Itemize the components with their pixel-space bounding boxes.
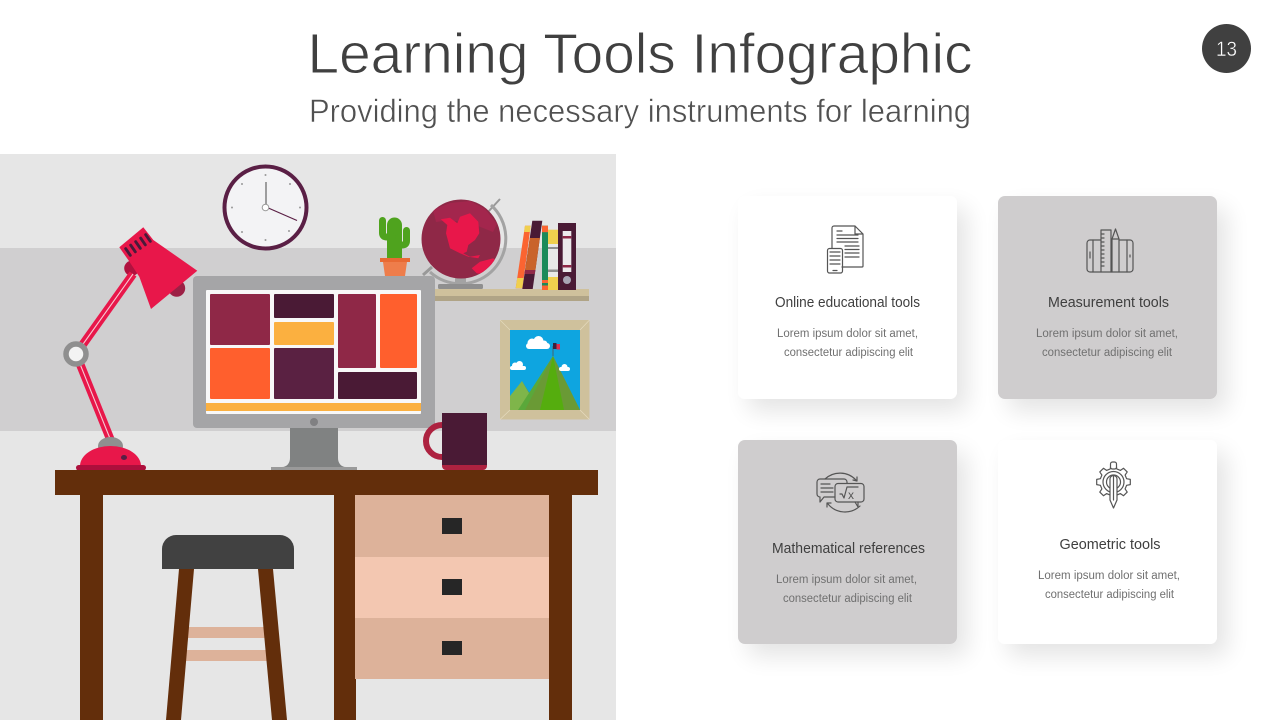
shelf	[435, 289, 589, 301]
icon: document and phone	[828, 226, 863, 273]
icon: computer monitor	[193, 276, 435, 470]
icon: desk lamp	[66, 227, 197, 470]
desk	[55, 470, 598, 720]
panel: measurement tools: Measurement tools	[1048, 295, 1169, 311]
panel: mathematical references: consectetur adipiscing elit	[783, 593, 913, 605]
icon: framed picture	[500, 320, 590, 420]
icon: speech bubbles with square root: x	[848, 488, 854, 502]
icon: speech bubbles with square root	[817, 473, 864, 512]
monitor screen tiles	[206, 294, 421, 411]
panel: geometric tools	[998, 440, 1217, 644]
panel: measurement tools	[998, 196, 1217, 399]
icon: cactus	[380, 220, 410, 276]
page number badge	[1202, 24, 1251, 73]
panel: mathematical references: Mathematical references	[772, 541, 925, 557]
panel: online educational tools: consectetur adipiscing elit	[784, 347, 914, 359]
panel: geometric tools: Lorem ipsum dolor sit amet,	[1038, 570, 1180, 582]
panel: measurement tools: consectetur adipiscing elit	[1042, 347, 1173, 359]
panel: mathematical references: Lorem ipsum dolor sit amet,	[776, 574, 917, 586]
panel: geometric tools: consectetur adipiscing elit	[1045, 589, 1175, 601]
stool	[162, 535, 294, 720]
panel: desk illustration	[0, 154, 616, 720]
panel: online educational tools: Lorem ipsum dolor sit amet,	[777, 328, 918, 340]
desk drawers	[355, 495, 549, 679]
page number badge: 13	[1216, 38, 1237, 61]
icon: ruler pencil and books	[1087, 229, 1133, 272]
panel: online educational tools	[738, 196, 957, 399]
icon: books	[516, 221, 576, 290]
icon: gear with compass pencil	[1097, 462, 1130, 508]
panel: online educational tools: Online educational tools	[775, 295, 920, 311]
subtitle: Providing the necessary instruments for learning	[309, 93, 971, 129]
icon: wall clock	[224, 166, 306, 248]
panel: mathematical references	[738, 440, 957, 644]
title: Learning Tools Infographic	[308, 22, 972, 86]
panel: measurement tools: Lorem ipsum dolor sit amet,	[1036, 328, 1178, 340]
icon: mug	[426, 413, 487, 470]
icon: globe	[422, 199, 506, 289]
panel: geometric tools: Geometric tools	[1060, 537, 1160, 553]
